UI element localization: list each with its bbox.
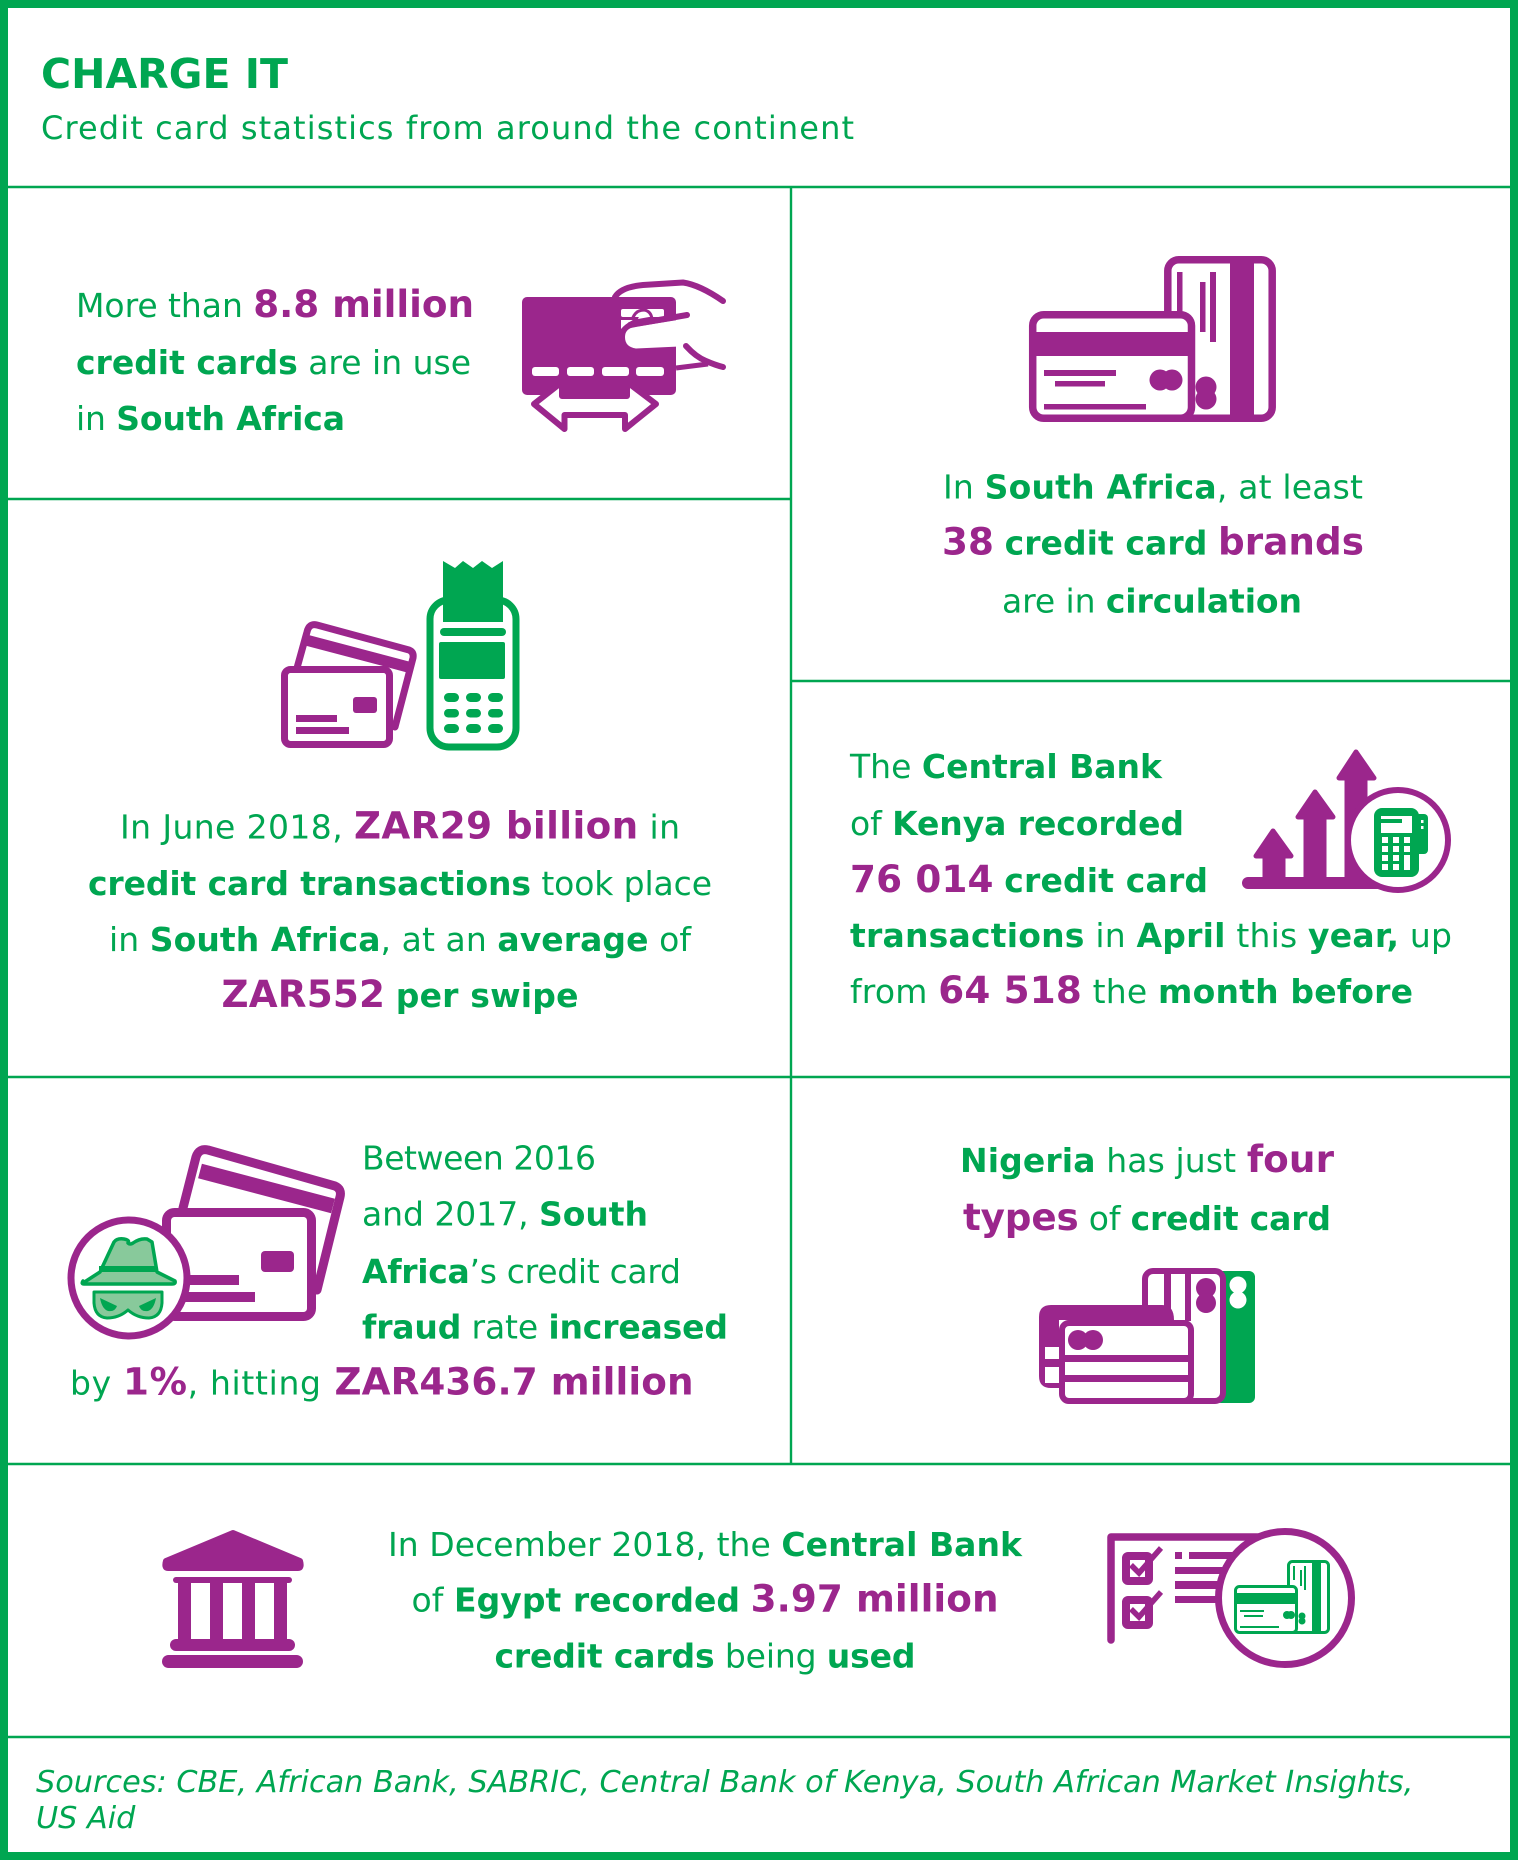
icon: checklist with magnified card	[1111, 1532, 1352, 1664]
sources	[36, 1765, 1413, 1836]
text block: credit card transactions took place	[88, 864, 712, 903]
text block	[388, 1525, 1023, 1676]
text block: The Central Bank	[849, 747, 1163, 786]
text block: of Egypt recorded 3.97 million	[412, 1576, 998, 1620]
panel: 38 credit card brands	[942, 258, 1364, 620]
text block: 38 credit card brands	[942, 520, 1364, 564]
panel: Nigeria	[960, 1137, 1335, 1403]
text block: are in circulation	[1002, 582, 1302, 620]
title: CHARGE IT	[41, 50, 288, 98]
text block: types of credit card	[963, 1195, 1331, 1239]
text block: and 2017, South	[362, 1194, 648, 1234]
text block: More than 8.8 million	[76, 282, 474, 326]
icon: four credit cards	[1039, 1271, 1255, 1403]
panel: ZAR29 billion transactions	[88, 561, 712, 1016]
text block: In December 2018, the Central Bank	[388, 1525, 1023, 1564]
text block	[849, 747, 1452, 1012]
icon: rising arrows with terminal	[1242, 752, 1448, 890]
icon: cards and payment terminal	[284, 561, 516, 747]
sources: Sources: CBE, African Bank, SABRIC, Central Bank of Kenya, South African Market Insights,	[36, 1765, 1413, 1800]
text block	[76, 282, 474, 438]
text block: of Kenya recorded	[850, 804, 1184, 843]
text block: Africa’s credit card	[362, 1252, 681, 1291]
sources: US Aid	[36, 1801, 136, 1836]
panel: header	[41, 50, 854, 147]
panel: 8.8 million credit cards	[76, 282, 723, 438]
text block: ZAR552 per swipe	[222, 972, 578, 1016]
text block: credit cards being used	[494, 1636, 916, 1676]
panel: Central Bank of Kenya	[849, 747, 1452, 1012]
text block: ZAR436.7 million	[334, 1360, 694, 1404]
icon: bank building	[162, 1533, 303, 1668]
text block: Nigeria has just four	[960, 1137, 1335, 1181]
icon: cards with masked fraudster	[71, 1150, 340, 1336]
text block: In June 2018, ZAR29 billion in	[120, 804, 680, 848]
text block: In South Africa, at least	[943, 468, 1363, 506]
text block: fraud rate increased	[362, 1308, 728, 1346]
text block: by 1%, hitting	[70, 1360, 321, 1404]
text block: credit cards are in use	[76, 343, 471, 382]
text block: Between 2016	[362, 1138, 596, 1178]
text block	[70, 1138, 728, 1404]
text block: from 64 518 the month before	[850, 968, 1413, 1012]
icon: hand swiping card	[522, 282, 723, 429]
text block: transactions in April this year, up	[850, 916, 1452, 955]
text block: in South Africa	[76, 399, 345, 438]
icon: two credit cards	[1033, 258, 1272, 418]
text block	[960, 1137, 1335, 1239]
text block: in South Africa, at an average of	[109, 920, 692, 959]
text block: 76 014 credit card	[850, 857, 1208, 901]
panel: fraud rate	[70, 1138, 728, 1404]
subtitle: Credit card statistics from around the continent	[41, 109, 854, 147]
text block	[88, 804, 712, 1016]
panel: Central Bank of Egypt	[162, 1525, 1352, 1676]
text block	[942, 468, 1364, 620]
